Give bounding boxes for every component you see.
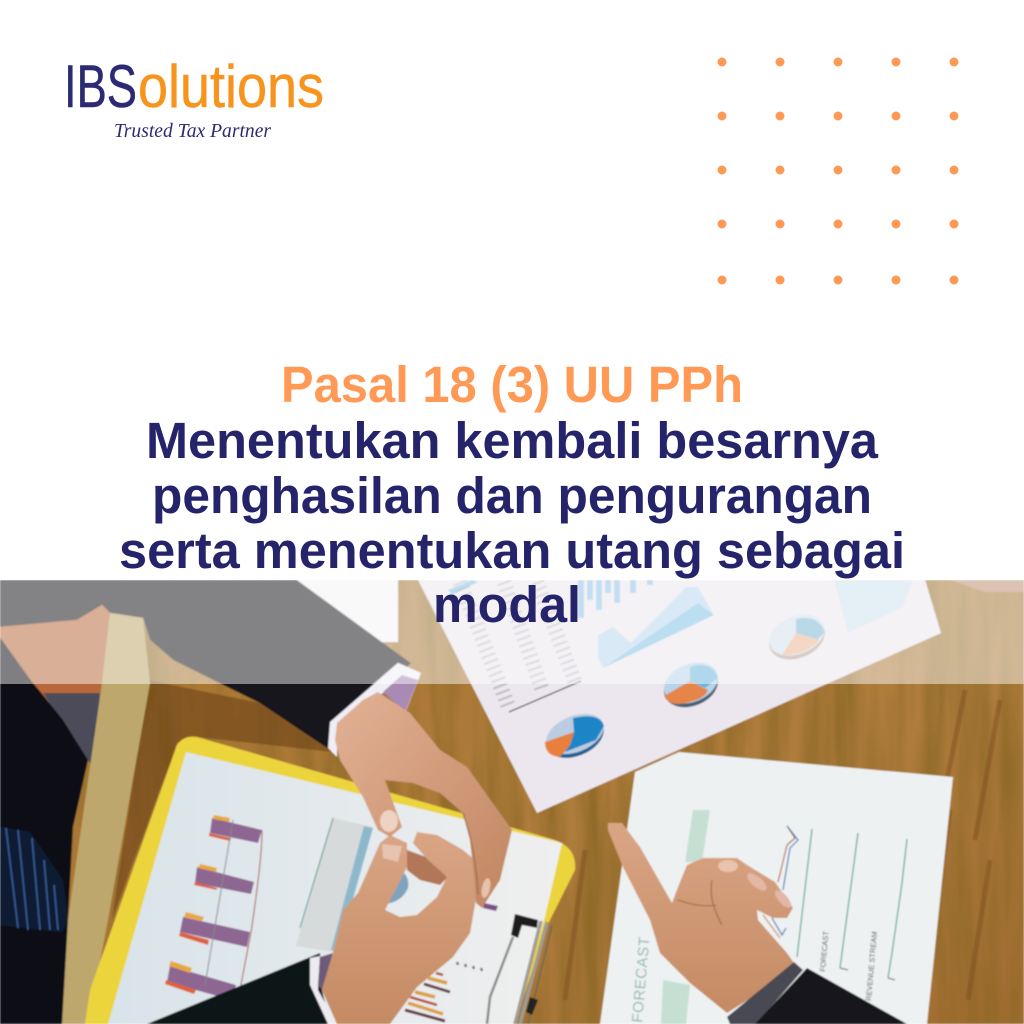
area chart xyxy=(598,587,714,668)
logo: olutions: olutions xyxy=(138,53,324,120)
logo tagline: Trusted Tax Partner xyxy=(114,120,271,142)
data table xyxy=(460,582,575,708)
top paper with pie charts xyxy=(418,580,941,813)
pie 2 xyxy=(763,607,831,667)
background floor left xyxy=(0,600,120,695)
left person dark suit xyxy=(0,637,88,1024)
title: line 3: serta menentukan utang sebagai xyxy=(119,522,905,579)
data table right xyxy=(834,580,913,633)
title: line 1: Menentukan kembali besarnya xyxy=(146,412,879,469)
hand at top right corner xyxy=(950,580,1024,592)
upper hand xyxy=(335,692,512,908)
pen clip xyxy=(487,937,513,1024)
decorative dot grid xyxy=(718,58,958,284)
small pie inside finger ring xyxy=(385,870,408,904)
logo xyxy=(64,53,324,142)
small chart strip xyxy=(448,580,478,595)
bottom right paper: FORECAST xyxy=(818,930,831,972)
shirt cuff xyxy=(328,663,421,757)
grey bench behind table xyxy=(43,693,100,770)
yellow clipboard with chart paper xyxy=(85,737,575,1024)
light table edge strip xyxy=(52,613,150,1024)
title: line 4: modal xyxy=(433,576,581,633)
striped tie xyxy=(0,827,68,932)
bottom right paper: REVENUE STREAM xyxy=(864,931,879,1001)
bottom right paper: FORECAST xyxy=(629,936,654,1023)
pie 1 xyxy=(658,655,724,715)
upper arm with suit jacket xyxy=(0,580,421,757)
lower hand forming ring xyxy=(322,832,477,1024)
purple bars xyxy=(165,815,262,1000)
curled fingers xyxy=(407,850,447,885)
wooden table xyxy=(0,580,1024,1024)
photo: business meeting over charts xyxy=(0,580,1024,1024)
title xyxy=(119,356,905,633)
logo: IBS: IBS xyxy=(64,53,137,120)
translucent white band behind heading xyxy=(0,580,1024,684)
right sleeve xyxy=(727,962,907,1024)
lower sleeve xyxy=(147,953,337,1024)
pie 3 xyxy=(540,706,610,766)
small stacked bars xyxy=(405,984,450,1021)
bottom right paper xyxy=(600,752,953,1024)
pointing hand xyxy=(608,823,794,1013)
title: orange heading line: Pasal 18 (3) UU PPh xyxy=(281,356,743,413)
dark wood between strip and clipboard xyxy=(100,680,333,1000)
title: line 2: penghasilan dan pengurangan xyxy=(152,467,872,524)
white page behind arm xyxy=(297,580,398,642)
bar chart xyxy=(581,580,650,618)
data table xyxy=(296,818,372,952)
